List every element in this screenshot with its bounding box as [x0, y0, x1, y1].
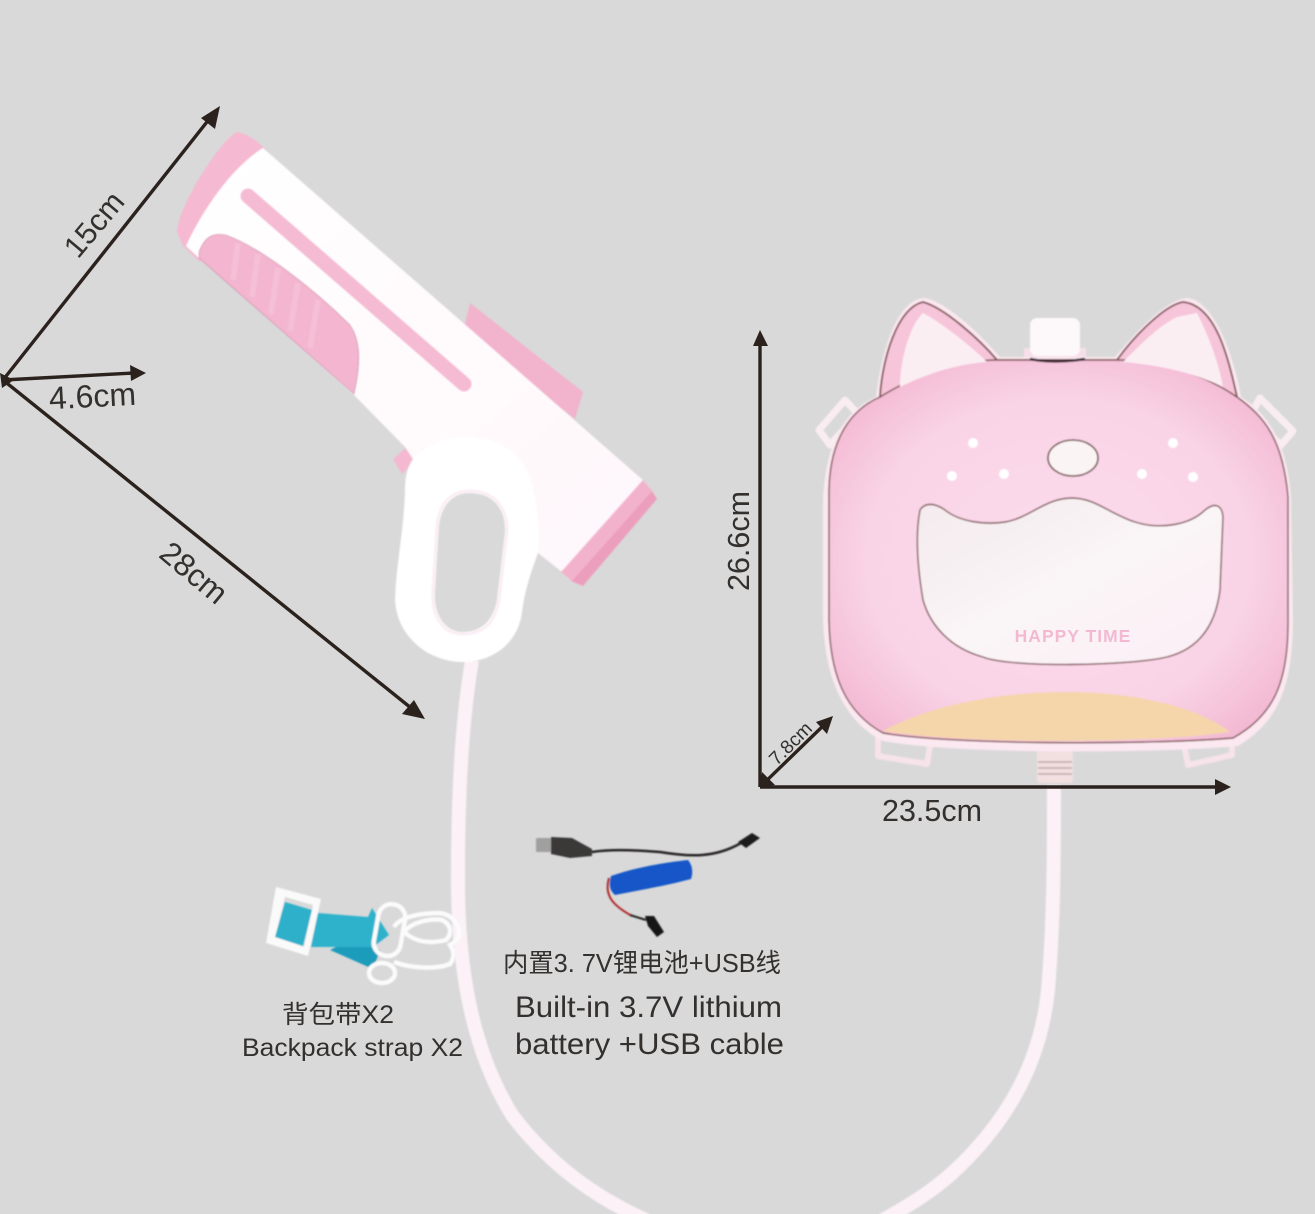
backpack side lugs: [819, 398, 1293, 445]
backpack inner ears: [900, 313, 987, 387]
arrow: backpack width 23.5cm: [760, 779, 1231, 795]
caption: battery: Built-in 3.7V lithium: [515, 991, 782, 1024]
backpack ears: [880, 302, 1237, 397]
gun muzzle ring: [561, 480, 652, 581]
usb body: [551, 837, 592, 858]
backpack dots: [947, 438, 1198, 482]
label: 7.8cm: 7.8cm: [765, 718, 817, 770]
backpack belly: [883, 692, 1230, 741]
label: 26.6cm: 26.6cm: [722, 491, 756, 591]
gun barrel: [186, 148, 643, 572]
backpack strap accessory: [266, 887, 459, 983]
label: 23.5cm: 23.5cm: [882, 794, 982, 828]
strap rings: [369, 902, 459, 983]
backpack window: [917, 498, 1223, 665]
arrow: gun length 28cm: [0, 373, 425, 719]
label: 28cm: 28cm: [153, 534, 235, 611]
gun grip panel: [199, 234, 359, 394]
caption: strap: 背包带X2: [282, 1001, 394, 1029]
usb wire: [592, 843, 741, 855]
caption: battery: 内置3. 7V锂电池+USB线: [503, 948, 781, 978]
strap buckle webbing: [275, 902, 312, 946]
hose from gun: [458, 660, 650, 1214]
strap lower band: [330, 940, 380, 969]
water gun: [177, 132, 657, 662]
label: 4.6cm: 4.6cm: [48, 376, 137, 416]
gun trigger: [393, 446, 420, 474]
gun top slide: [463, 303, 583, 419]
label: 15cm: 15cm: [57, 185, 131, 264]
caption: strap: [242, 1001, 463, 1062]
backpack top seam: [1030, 359, 1085, 361]
lithium battery accessory: [608, 860, 692, 937]
gun handle: [395, 437, 539, 662]
backpack: [819, 298, 1293, 783]
backpack cap: [1024, 318, 1086, 358]
strap ribbon: [311, 908, 389, 947]
usb cable accessory: [536, 833, 760, 858]
caption: strap: Backpack strap X2: [242, 1034, 463, 1062]
battery wire red: [608, 878, 632, 916]
battery cell: [610, 860, 692, 895]
backpack outline halo: [823, 298, 1293, 751]
gun side stripe: [248, 196, 464, 384]
battery plug: [645, 916, 664, 937]
arrow: backpack height 26.6cm: [753, 330, 768, 787]
arrow: backpack depth 7.8cm: [760, 716, 833, 787]
grip ridges: [233, 243, 318, 348]
battery wire black: [630, 915, 646, 920]
usb connector: [738, 833, 760, 848]
arrow: gun width 4.6cm: [3, 365, 146, 381]
backpack label: HAPPY TIME: [1015, 626, 1131, 646]
caption: battery: battery +USB cable: [515, 1028, 784, 1061]
gun rear cap: [177, 132, 266, 262]
strap buckle: [266, 887, 321, 956]
caption: battery: [503, 948, 784, 1061]
backpack body: [829, 360, 1288, 743]
handle hole rim: [433, 491, 507, 634]
backpack nose: [1048, 440, 1098, 476]
backpack bottom lugs: [878, 735, 1232, 765]
hose from backpack: [880, 785, 1054, 1214]
gun muzzle disc: [571, 488, 657, 586]
arrow: gun height 15cm: [3, 106, 220, 380]
usb plug: [536, 838, 552, 852]
backpack connector: [1037, 750, 1073, 783]
